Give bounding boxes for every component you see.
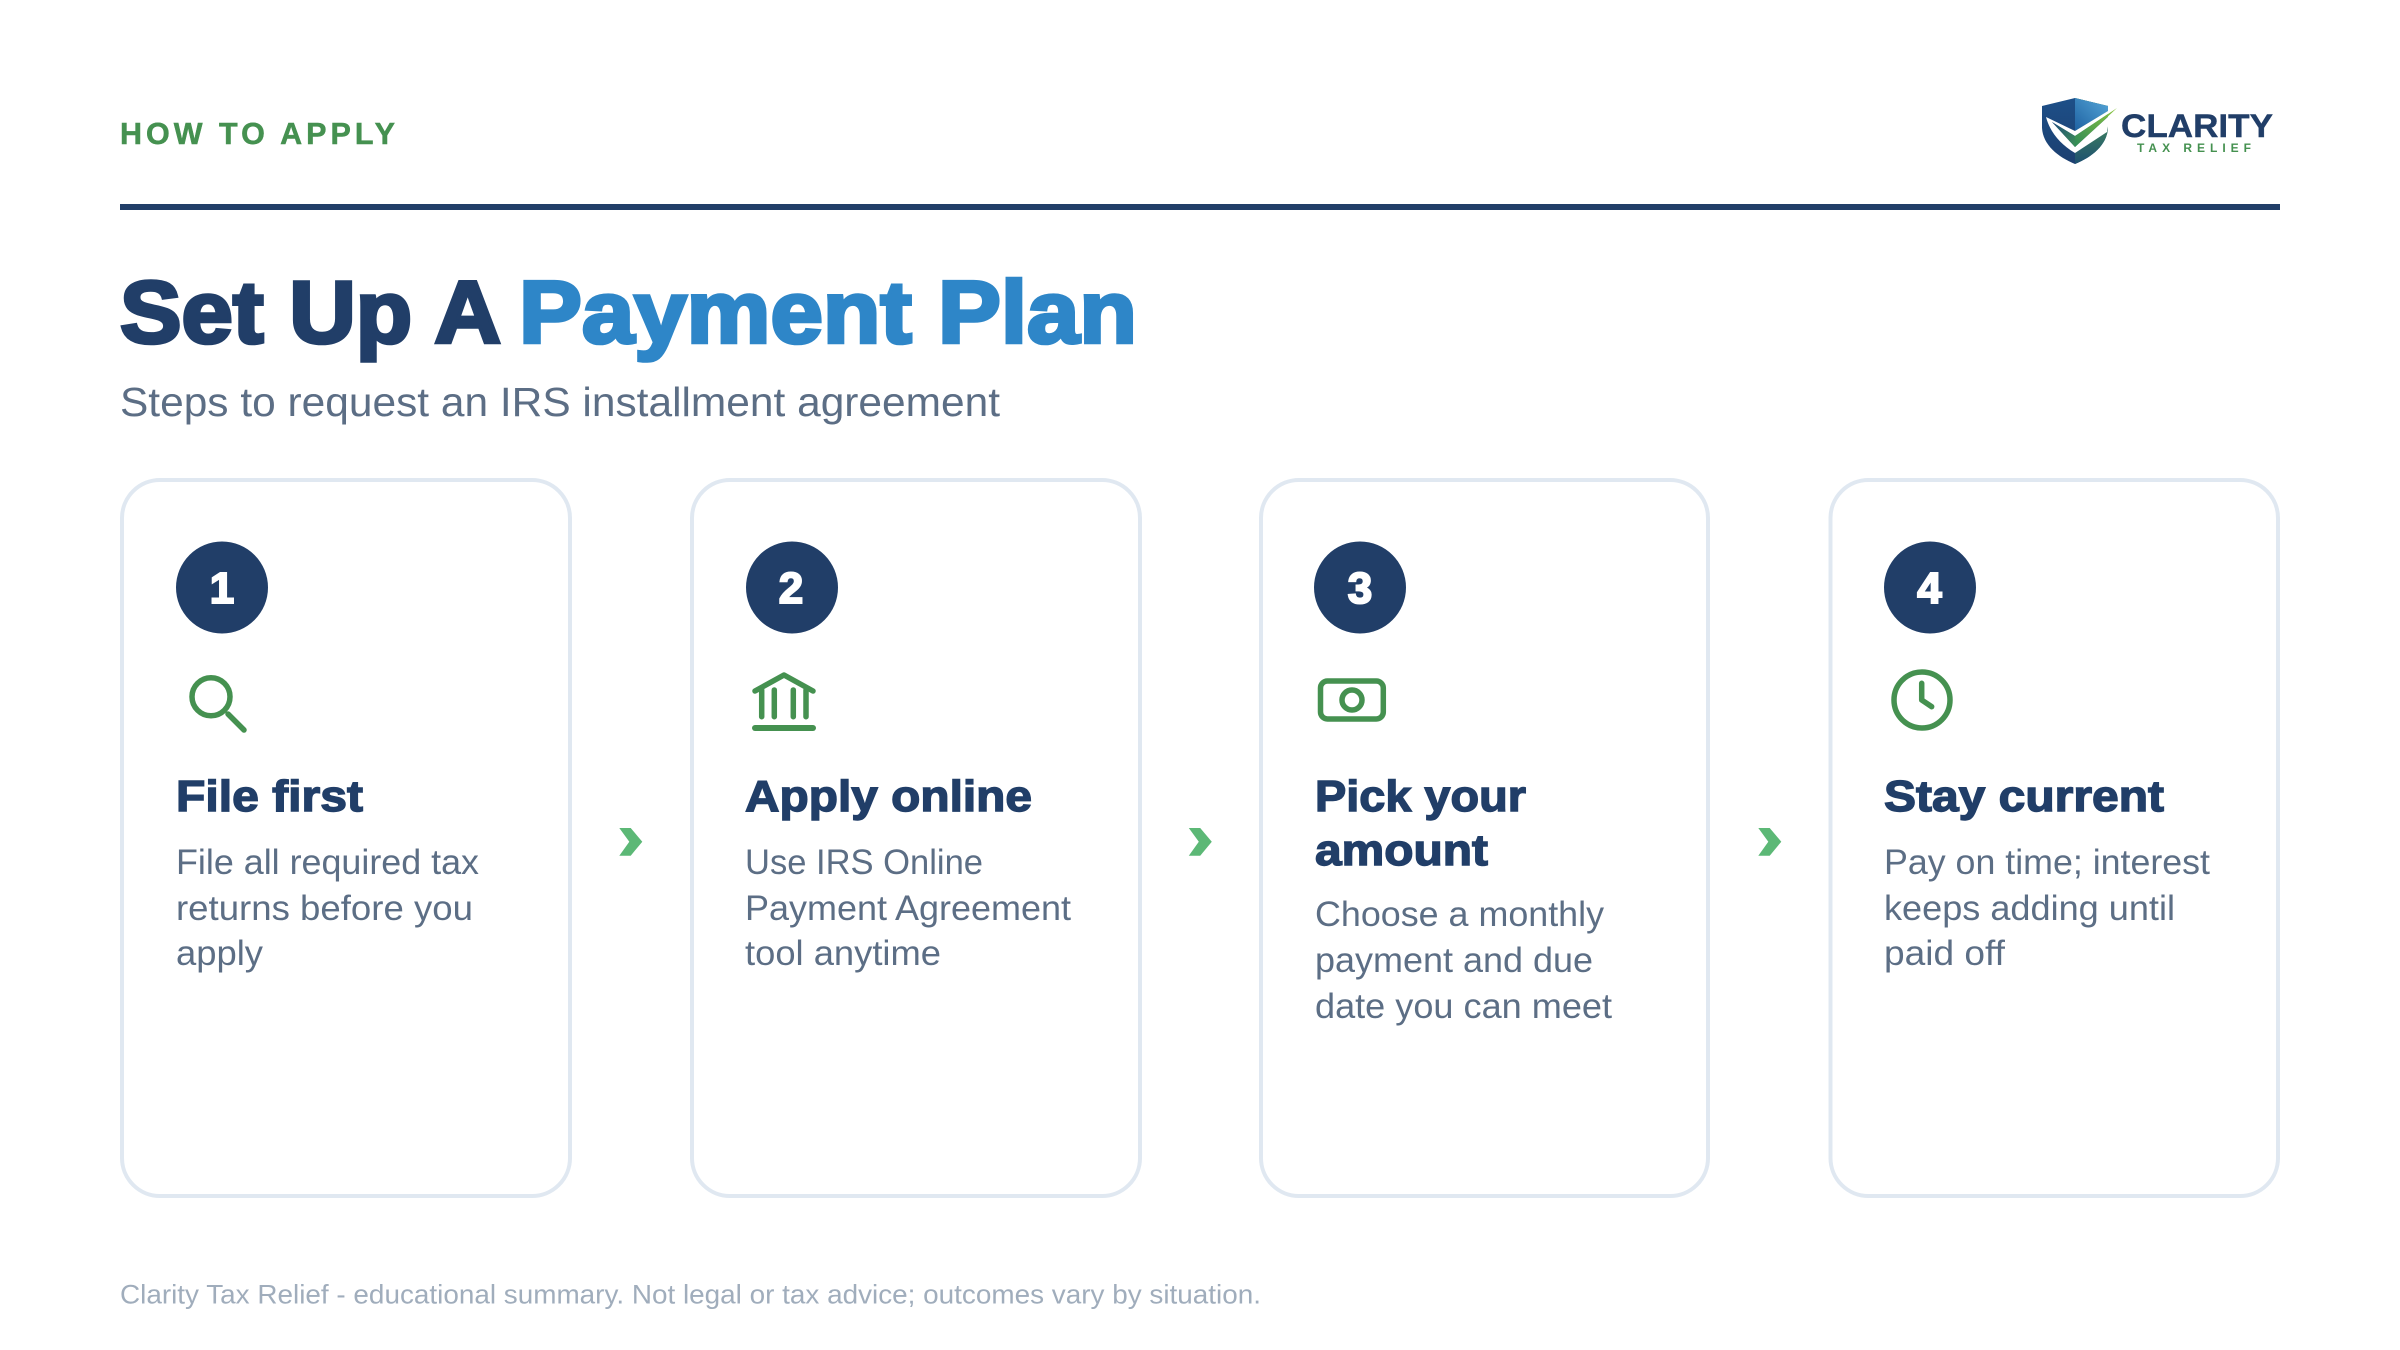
step 4 description: paid off [1884, 934, 2005, 973]
panel: step 2 Apply online [692, 480, 1140, 1196]
step 1 description: apply [176, 934, 264, 973]
icon: banknote [1320, 681, 1383, 719]
title [120, 262, 1137, 362]
logo wordmark: CLARITY [2121, 108, 2273, 144]
step 4 heading: Stay current [1884, 772, 2164, 821]
step 2 description: tool anytime [745, 934, 941, 973]
panel: step 3 Pick your amount [1261, 480, 1708, 1196]
title: Payment Plan [519, 262, 1137, 362]
arrow 1 [619, 828, 642, 856]
icon: bank building [755, 675, 813, 728]
step 3 heading: Pick your [1315, 772, 1526, 821]
step 1 description [176, 843, 479, 973]
icon: shield with check [2042, 98, 2117, 164]
logo: Clarity Tax Relief [2042, 98, 2273, 164]
step 3 description: Choose a monthly [1315, 895, 1605, 934]
step number 4: 4 [1917, 564, 1942, 613]
step 3 heading [1315, 772, 1526, 875]
title: Set Up A [120, 262, 501, 362]
step 1 heading: File first [176, 772, 363, 821]
step number 3 [1314, 542, 1406, 634]
logo tagline: TAX RELIEF [2137, 141, 2251, 155]
step 4 description: Pay on time; interest [1884, 843, 2210, 882]
step 1 description: returns before you [176, 889, 473, 928]
step 3 description: payment and due [1315, 941, 1593, 980]
step 2 description [745, 843, 1071, 973]
step 4 description: keeps adding until [1884, 889, 2175, 928]
step 3 description: date you can meet [1315, 987, 1612, 1026]
step number 2: 2 [779, 564, 803, 613]
step number 2 [746, 542, 838, 634]
panel: step 1 File first [122, 480, 570, 1196]
footer disclaimer: Clarity Tax Relief - educational summary. Not legal or tax advice; outcomes vary by situation. [120, 1280, 1261, 1310]
step number 1: 1 [210, 564, 234, 613]
step number 1 [176, 542, 268, 634]
step 3 heading: amount [1315, 826, 1488, 875]
step number 3: 3 [1348, 564, 1372, 613]
step 4 description [1884, 843, 2210, 973]
step number 4 [1884, 542, 1976, 634]
step 3 description [1315, 895, 1612, 1026]
panel: step 4 Stay current [1830, 480, 2278, 1196]
step 2 heading: Apply online [745, 772, 1032, 821]
icon: magnifying glass [192, 678, 244, 730]
subtitle: Steps to request an IRS installment agreement [120, 379, 1000, 425]
step 2 description: Use IRS Online [745, 843, 983, 882]
icon: clock [1894, 672, 1950, 728]
step 1 description: File all required tax [176, 843, 479, 882]
eyebrow heading: HOW TO APPLY [120, 117, 395, 151]
arrow 2 [1189, 828, 1212, 856]
step 2 description: Payment Agreement [745, 889, 1071, 928]
arrow 3 [1758, 828, 1781, 856]
